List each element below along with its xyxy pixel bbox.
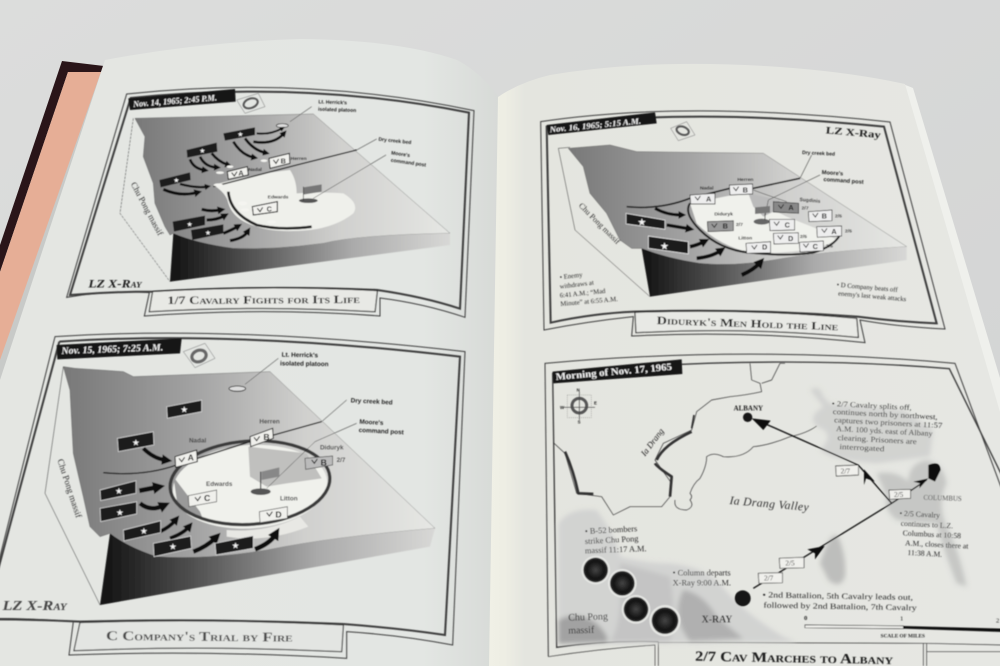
map labels: isolated platoon xyxy=(280,360,329,368)
flag xyxy=(251,467,279,495)
panel: Nov 16 map xyxy=(541,111,945,343)
US units: A xyxy=(238,169,244,178)
title tab: 1/7 Cavalry Fights for Its Life xyxy=(167,294,360,307)
outer frame bottom xyxy=(548,642,1000,666)
map labels: Moore's xyxy=(391,150,411,159)
US units: B xyxy=(321,457,327,467)
map labels xyxy=(568,405,962,637)
X-Ray and Albany points xyxy=(735,413,752,606)
map labels: Diduryk xyxy=(714,212,733,218)
icon: compass xyxy=(560,388,597,424)
enemy units: ★ xyxy=(232,542,240,552)
enemy arrows xyxy=(139,448,275,552)
US units: B xyxy=(263,432,270,442)
title tab xyxy=(149,288,377,312)
map labels: ALBANY xyxy=(734,405,763,413)
map labels: Herren xyxy=(259,419,280,426)
US units: A xyxy=(831,227,837,236)
scale bar: 0 xyxy=(804,615,808,622)
note: 2/7 cavalry: • 2/7 Cavalry splits off, xyxy=(832,399,912,412)
note: enemy withdraws: withdraws at xyxy=(559,280,594,291)
flag xyxy=(754,206,770,225)
US units: B xyxy=(281,156,286,165)
map labels: 2/5 xyxy=(845,228,852,234)
date label xyxy=(547,112,657,135)
map labels: Litton xyxy=(738,235,752,241)
icon: compass xyxy=(183,343,215,368)
enemy units: ★ xyxy=(140,527,148,537)
US units: C xyxy=(785,220,791,229)
icon: compass: E xyxy=(594,400,597,405)
title tab xyxy=(635,311,858,337)
US units: D xyxy=(762,243,767,252)
outer frame xyxy=(541,111,945,343)
column labels xyxy=(758,465,911,583)
map labels: command post xyxy=(359,427,405,436)
label: massif: Chu Pong massif xyxy=(577,201,622,246)
bomb strikes xyxy=(581,556,681,636)
map labels: Dry creek bed xyxy=(351,397,393,407)
note: column departs: • Column departs xyxy=(673,569,731,578)
map labels: Lt. Herrick's xyxy=(318,99,347,106)
enemy units: ★ xyxy=(660,242,669,253)
terrain block xyxy=(45,367,435,605)
note: 2/7 cavalry xyxy=(832,399,943,453)
note: enemy withdraws: • Enemy xyxy=(559,272,584,281)
map labels xyxy=(248,99,427,200)
rivers xyxy=(553,363,817,515)
map labels: Sugdinis xyxy=(799,197,821,205)
map labels: command post xyxy=(390,158,427,169)
map labels: Dry creek bed xyxy=(378,137,412,146)
note: B-52 strike xyxy=(585,524,647,555)
map labels: massif xyxy=(568,625,595,637)
note: column departs xyxy=(673,569,731,588)
title tab: C Company's Trial by Fire xyxy=(106,628,293,645)
US units: D xyxy=(275,509,282,519)
note: enemy withdraws: Minute” at 6:55 A.M. xyxy=(560,296,618,308)
map labels: Ia Drang xyxy=(638,426,666,459)
US units: A xyxy=(788,203,794,212)
date label: Nov. 15, 1965; 7:25 A.M. xyxy=(60,342,163,357)
column labels: 2/5 xyxy=(894,490,904,499)
enemy units: ★ xyxy=(115,487,123,497)
terrain block xyxy=(558,145,907,297)
title tab: Diduryk's Men Hold the Line xyxy=(657,315,839,333)
note: D Company xyxy=(836,282,907,303)
date label: Nov. 14, 1965; 2:45 P.M. xyxy=(132,92,217,109)
map labels: 2/5 xyxy=(826,244,833,250)
enemy arrows xyxy=(163,129,283,241)
label: LZ X-Ray: LZ X-Ray xyxy=(87,276,143,290)
page stack edge xyxy=(903,84,1000,414)
US units: A xyxy=(188,453,195,463)
note: B-52 strike: • B-52 bombers xyxy=(585,524,637,536)
enemy units: ★ xyxy=(187,221,193,229)
map labels xyxy=(189,352,405,503)
flag xyxy=(299,184,322,203)
map labels: 2/7 xyxy=(337,457,346,464)
enemy units xyxy=(159,127,255,240)
terrain: central highlands xyxy=(820,536,845,584)
map labels: 2/5 xyxy=(835,214,842,220)
note: B-52 strike: strike Chu Pong xyxy=(585,534,639,546)
note: 2/7 cavalry: captures two prisoners at 11:57 xyxy=(834,415,943,430)
map labels: 2/7 xyxy=(736,222,743,228)
enemy units: ★ xyxy=(132,438,140,448)
terrain: northeast highlands xyxy=(810,388,933,463)
icon: compass: N xyxy=(577,388,580,393)
US units xyxy=(227,153,290,215)
map labels: 2/5 xyxy=(800,234,807,240)
note: 2nd Battalion: • 2nd Battalion, 5th Cavalry leads out, xyxy=(762,590,913,602)
note: 2/7 cavalry: A.M. 100 yds. east of Albany xyxy=(836,424,933,438)
date label: Morning of Nov. 17, 1965 xyxy=(555,362,672,383)
label: massif: Chu Pong massif xyxy=(55,458,84,519)
note: 2/5 cavalry: continues to L.Z. xyxy=(901,519,953,530)
US units: B xyxy=(822,212,827,221)
note: 2nd Battalion: followed by 2nd Battalion, 7th Cavalry xyxy=(763,601,917,612)
map labels: Edwards xyxy=(206,481,233,488)
icon: compass xyxy=(671,122,695,141)
scale bar: 1 xyxy=(900,616,903,623)
label: massif: Chu Pong massif xyxy=(129,180,166,237)
US units: C xyxy=(204,493,211,503)
icon: compass xyxy=(237,93,265,113)
left page xyxy=(0,39,498,666)
date label: Nov. 16, 1965; 5:15 A.M. xyxy=(548,117,641,134)
date label xyxy=(128,89,236,110)
heading: LZ X-Ray xyxy=(825,125,881,141)
map labels: Dry creek bed xyxy=(802,150,835,158)
map labels: Litton xyxy=(280,496,298,503)
US units: C xyxy=(267,204,273,213)
note: D Company: • D Company beats off xyxy=(836,282,899,294)
panel: Nov 15 map xyxy=(0,333,465,658)
US units: B xyxy=(723,222,728,231)
column labels: 2/7 xyxy=(841,467,850,476)
enemy units: ★ xyxy=(180,406,188,416)
outer frame xyxy=(67,87,474,317)
note: B-52 strike: massif 11:17 A.M. xyxy=(585,544,647,555)
column labels: 2/7 xyxy=(764,574,774,583)
terrain block xyxy=(120,114,450,282)
perimeter and creek lines xyxy=(627,155,840,255)
US units: A xyxy=(706,195,712,204)
line of C company xyxy=(228,192,312,228)
note: 2nd Battalion xyxy=(762,590,917,612)
inner frame xyxy=(553,362,1000,647)
map labels: COLUMBUS xyxy=(923,493,962,503)
map labels: Herren xyxy=(291,156,307,162)
enemy units: ★ xyxy=(199,147,205,155)
map labels: isolated platoon xyxy=(318,107,356,114)
panel: Nov 17 map xyxy=(545,354,1000,666)
enemy units xyxy=(100,400,253,557)
scale bar: 2 xyxy=(996,618,999,625)
inner frame xyxy=(547,117,937,323)
note: column departs: X-Ray 9:00 A.M. xyxy=(673,579,731,588)
US units: C xyxy=(813,242,819,251)
perimeter ring xyxy=(167,436,333,530)
US units xyxy=(175,428,333,523)
enemy units: ★ xyxy=(116,508,124,518)
small explosion marks xyxy=(214,159,276,224)
scale bar: SCALE OF MILES xyxy=(881,634,925,639)
note: 2/7 cavalry: clearing. Prisoners are xyxy=(837,433,918,446)
enemy units: ★ xyxy=(205,229,211,237)
left page edge band xyxy=(0,66,108,382)
enemy units: ★ xyxy=(237,131,243,139)
note: D Company: enemy's last weak attacks xyxy=(838,290,907,303)
outer frame xyxy=(545,354,1000,657)
map labels xyxy=(700,150,864,250)
map labels: command post xyxy=(823,177,864,186)
note: 2/7 cavalry: continues north by northwest, xyxy=(833,407,938,421)
book cover edge xyxy=(0,61,104,272)
map labels: Nadal xyxy=(700,185,714,191)
inner frame xyxy=(70,92,469,309)
terrain: Columbus highlands xyxy=(877,460,967,587)
label: LZ X-Ray: LZ X-Ray xyxy=(1,598,68,613)
enemy units: ★ xyxy=(173,176,179,184)
march route arrows xyxy=(753,420,927,588)
enemy units xyxy=(626,213,688,254)
map labels: Moore's xyxy=(822,170,843,177)
note: 2/5 cavalry: 11:38 A.M. xyxy=(907,548,943,559)
note: enemy withdraws xyxy=(559,272,618,308)
map labels: Herren xyxy=(737,177,753,183)
map labels: Nadal xyxy=(248,167,263,173)
map labels: Ia Drang Valley xyxy=(728,494,810,514)
US units: B xyxy=(743,185,748,194)
icon: compass: S xyxy=(578,419,581,424)
outer frame xyxy=(0,333,465,658)
map labels: Edwards xyxy=(268,194,289,200)
map labels: 2/7 xyxy=(802,205,809,211)
terrain: southwest highlands xyxy=(558,509,797,644)
Columbus blob xyxy=(928,463,941,482)
map labels: Chu Pong xyxy=(568,611,608,624)
column labels: 2/5 xyxy=(785,559,795,568)
map labels: Lt. Herrick's xyxy=(282,352,319,359)
date label xyxy=(57,338,182,359)
enemy units: ★ xyxy=(637,217,646,228)
creek and leader lines xyxy=(213,107,386,198)
note: 2/5 cavalry: A.M., closes there at xyxy=(905,538,970,551)
note: enemy withdraws: 6:41 A.M.; “Mad xyxy=(559,288,606,300)
pink endpaper xyxy=(0,72,103,362)
map labels: X-RAY xyxy=(702,615,733,626)
map labels: Diduryk xyxy=(320,445,344,452)
enemy units: ★ xyxy=(169,542,177,552)
map labels: Moore's xyxy=(359,419,384,427)
note: 2/7 cavalry: interrogated xyxy=(839,442,885,453)
note: 2/5 cavalry xyxy=(899,509,970,559)
map labels: Nadal xyxy=(189,438,206,445)
panel: Nov 14 map xyxy=(67,87,474,317)
enemy arrows xyxy=(655,208,759,275)
inner frame xyxy=(0,338,460,635)
note: 2/5 cavalry: • 2/5 Cavalry xyxy=(899,509,940,520)
arrowheads xyxy=(752,418,928,559)
creek and leader lines xyxy=(103,358,357,488)
right page xyxy=(489,64,1000,666)
note: 2/5 cavalry: Columbus at 10:58 xyxy=(903,528,961,540)
US units: D xyxy=(788,234,793,243)
scale bar xyxy=(804,615,1000,639)
icon: compass: W xyxy=(560,405,565,410)
US units xyxy=(690,184,842,253)
title tab xyxy=(74,621,343,652)
